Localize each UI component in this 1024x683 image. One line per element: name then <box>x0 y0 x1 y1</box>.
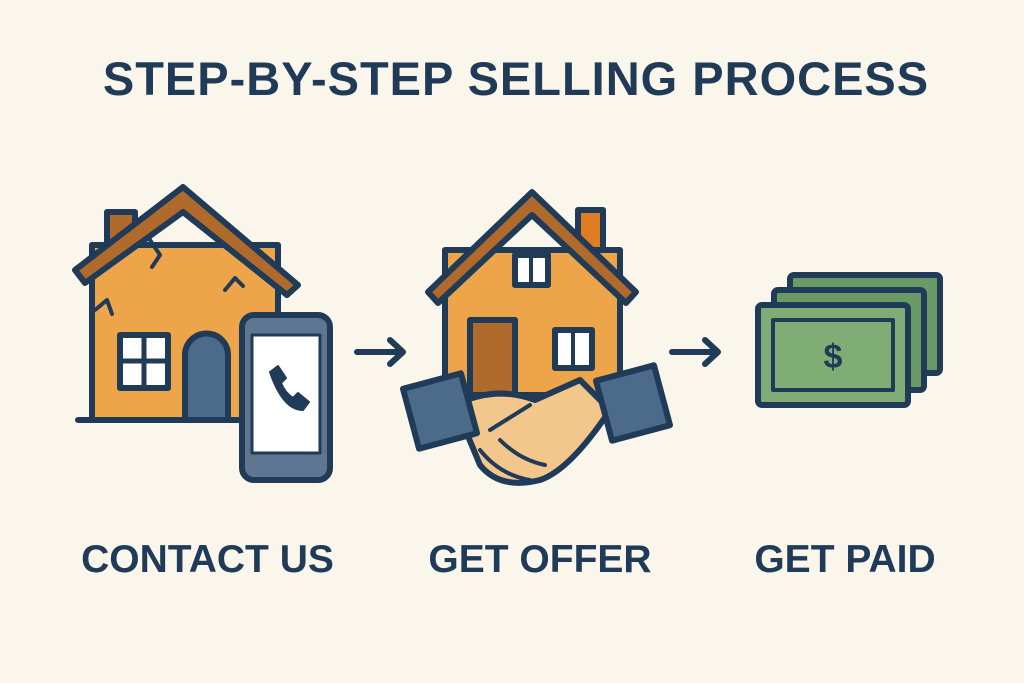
arrow 2 <box>672 340 718 364</box>
icon: money <box>758 275 940 405</box>
icon: money: $ <box>824 338 843 376</box>
icon: cracked house <box>75 187 298 420</box>
icon: house with handshake <box>403 192 670 483</box>
icon: phone <box>242 315 330 480</box>
arrow 1 <box>357 340 403 364</box>
title: STEP-BY-STEP SELLING PROCESS <box>103 52 929 105</box>
label: contact us: CONTACT US <box>81 538 334 581</box>
label: get paid: GET PAID <box>754 538 936 581</box>
label: get offer: GET OFFER <box>428 538 652 581</box>
